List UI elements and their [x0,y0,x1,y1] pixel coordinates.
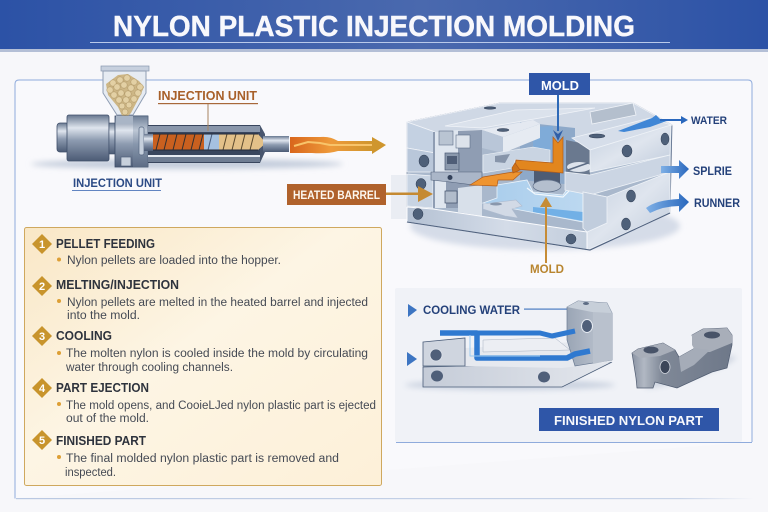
step 2: MELTING/INJECTION [56,278,179,292]
label: cooling water: COOLING WATER [423,303,520,317]
screw with heated sections [153,134,266,150]
step 2: Nylon pellets are melted in the heated barrel and injected [67,297,368,309]
callout: water: WATER [691,115,727,127]
step 5 [32,430,339,479]
cooling channels [440,331,590,358]
step 2 [32,276,368,322]
step 5: inspected. [65,467,116,479]
callout: mold top: MOLD [541,79,579,93]
panel: cooling and finished part [395,288,742,442]
base plate [407,207,670,250]
step 5: FINISHED PART [56,434,146,448]
step 3 [32,326,368,374]
label: cooling water [408,303,568,317]
callout: sprue: SPLRIE [693,164,732,178]
step 1: PELLET FEEDING [56,237,155,251]
right blocks [565,118,671,250]
step 3: 3 [39,331,45,343]
callout: runner: RUNNER [694,196,740,210]
finished nylon part [632,328,738,393]
step 2: into the mold. [67,310,140,322]
molten nylon channel [470,137,563,186]
bolt holes [413,107,669,244]
label: injection unit (orange): INJECTION UNIT [158,88,257,103]
injection unit illustration [31,66,386,169]
callout: heated barrel [287,184,433,205]
step 4: 4 [39,383,46,395]
icon: inlet marker [407,352,417,366]
step 1: 1 [39,239,45,251]
step 4 [32,378,376,425]
step 3: water through cooling channels. [65,362,233,374]
step 5: The final molded nylon plastic part is removed and [66,453,339,465]
step 4: The mold opens, and CooieLJed nylon plastic part is ejected [66,400,376,412]
top plates [407,103,672,208]
melt stream arrow [290,137,386,154]
label: finished nylon part: FINISHED NYLON PART [554,413,703,428]
outer panel frame [15,80,754,499]
callout: sprue [661,160,732,179]
lower mold half with cooling channels [405,301,615,390]
step 2: 2 [39,281,45,293]
label: injection unit (orange) [158,88,258,131]
step 3: COOLING [56,329,112,343]
title: NYLON PLASTIC INJECTION MOLDING [113,11,635,43]
blue cooling cavity [483,180,583,222]
label: injection unit (blue): INJECTION UNIT [73,176,163,190]
label: finished nylon part [539,408,719,431]
icon: hopper with nylon pellets [101,66,149,120]
centre cut away [431,120,591,222]
nozzle [263,136,289,152]
header band [0,0,768,52]
callout: mold bottom: MOLD [530,262,564,276]
callout: runner [646,193,740,213]
step 5: 5 [39,435,45,447]
callout: heated barrel: HEATED BARREL [293,188,380,202]
step 3: The molten nylon is cooled inside the mold by circulating [66,348,368,360]
panel: process steps [24,228,382,486]
callout: mold top [529,73,590,141]
step 4: PART EJECTION [56,381,149,395]
step 4: out of the mold. [66,413,149,425]
barrel housing [57,115,265,167]
mold cutaway illustration [391,103,680,250]
callout: water [618,115,727,132]
step 1 [32,234,281,267]
callout: mold bottom [530,197,564,276]
mold body [407,103,672,250]
step 1: Nylon pellets are loaded into the hopper. [67,255,281,267]
